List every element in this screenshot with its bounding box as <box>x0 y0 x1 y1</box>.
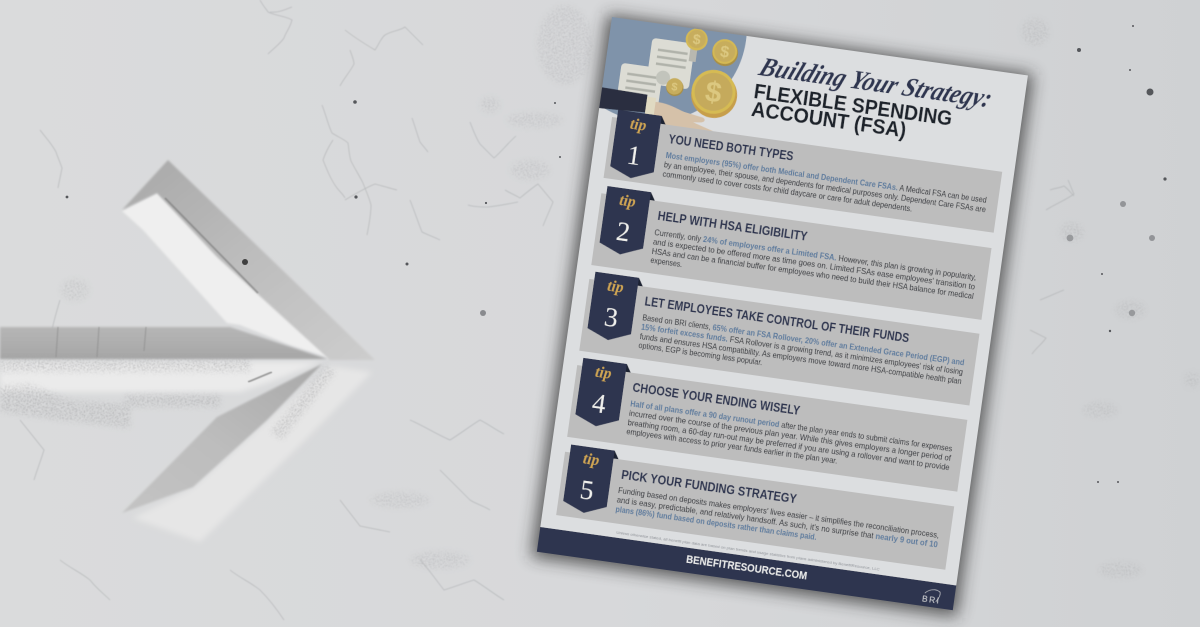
title <box>749 51 997 154</box>
BRI logo <box>921 588 941 606</box>
panel: tip 5 <box>556 444 955 570</box>
tip 5 heading: PICK YOUR FUNDING STRATEGY <box>620 468 798 506</box>
illustration: coin top: $ <box>692 31 702 48</box>
panel: tip 4 <box>567 357 969 492</box>
arrow: dark grooves and speckled scars <box>0 198 372 440</box>
tip 1 body: commonly used to cover costs for child daycare or care for adult dependents. <box>662 168 913 213</box>
tip 3 body <box>638 312 965 395</box>
tip 5 ribbon: tip <box>582 450 601 469</box>
illustration: front receipt <box>618 63 670 102</box>
tip 5 body: plans (86%) fund based on deposits rather than claims paid. <box>615 504 817 542</box>
illustration: suit sleeve <box>599 87 648 115</box>
tip 3 ribbon: 3 <box>602 302 620 333</box>
illustration: coin top <box>686 28 708 51</box>
illustration: open hand <box>653 102 716 131</box>
arrow: upper barb <box>122 160 375 360</box>
tip 3 ribbon <box>586 272 644 344</box>
illustration: back receipt <box>646 38 698 90</box>
tip 2 ribbon: 2 <box>614 216 632 247</box>
title: script line: Building Your Strategy: <box>754 52 997 113</box>
tip 2 body: expenses. <box>650 255 683 269</box>
tip 4 body: breathing room, a 60-day run-out may be preferred if you are using a rollover and want to provide <box>627 417 951 472</box>
paper shadow <box>531 14 1033 617</box>
arrow carved into the concrete <box>0 160 375 542</box>
tip 1 ribbon: tip <box>629 116 648 135</box>
arrow: light highlights around the carved strokes <box>122 193 330 358</box>
tip 3 heading: LET EMPLOYEES TAKE CONTROL OF THEIR FUNDS <box>644 294 910 345</box>
tip 3 body: funds and ensures HSA compatibility. As employers move toward more HSA-compatible health plan <box>639 331 963 386</box>
tip 1 heading: YOU NEED BOTH TYPES <box>668 132 794 164</box>
illustration: coin right <box>712 39 738 66</box>
tip 1 ribbon <box>609 110 667 182</box>
tip 4 ribbon: tip <box>594 364 613 383</box>
title: line one: FLEXIBLE SPENDING <box>752 79 954 131</box>
panel: tip 2 <box>591 185 993 320</box>
panel: tip 3 <box>579 271 981 406</box>
title: line two: ACCOUNT (FSA) <box>750 97 908 142</box>
tip 5 ribbon: 5 <box>578 474 596 506</box>
illustration: coin small: $ <box>671 81 678 94</box>
tip 2 heading: HELP WITH HSA ELIGIBILITY <box>657 209 809 244</box>
header illustration <box>599 17 747 131</box>
tip 2 ribbon: tip <box>618 192 637 211</box>
BRI logo: BRI <box>921 593 940 606</box>
tip 5 ribbon <box>562 444 620 517</box>
tip 2 body: HSAs and can be a financial buffer for employees who need to build their HSA balance for medical <box>651 246 975 301</box>
tip 1 body: by an employee, their spouse, and dependents for medical purposes only. Dependent Care FSAs are <box>663 159 987 214</box>
tip 4 body <box>626 398 954 482</box>
illustration: blue circle <box>602 17 747 115</box>
illustration: shirt cuff <box>644 96 656 115</box>
tip 2 body: Currently, only 24% of employers offer a Limited FSA. However, this plan is growing in popularity, <box>654 227 977 282</box>
tip 4 ribbon: 4 <box>590 388 608 419</box>
illustration: coin right: $ <box>719 43 730 62</box>
tip 3 body: Based on BRI clients, 65% offer an FSA Rollover, 20% offer an Extended Grace Period (EGP) and <box>642 312 965 367</box>
flyer paper <box>537 17 1028 610</box>
fine print: Unless otherwise stated, all benefit plan data are based on plan trends and usage statistics from plans administered by BenefitResource, LLC <box>616 531 880 572</box>
tip 4 ribbon <box>574 358 632 430</box>
tip 3 body: options, EGP is becoming less popular. <box>638 340 763 367</box>
illustration: coin large <box>690 70 738 118</box>
illustration: coin large: $ <box>703 76 724 110</box>
illustration: coin small <box>666 78 684 96</box>
tip 5 body: and is easy, predictable, and relatively handsoff. As such, it's no surprise that nearly 9 out of 10 <box>616 494 939 549</box>
footer bar <box>537 527 956 610</box>
tip 3 body: 15% forfeit excess funds. FSA Rollover is a growing trend, as it minimizes employees' risk of losing <box>641 322 964 377</box>
footer url: BENEFITRESOURCE.COM <box>685 554 808 583</box>
arrow: shaft <box>0 327 327 359</box>
arrow: lower barb <box>122 364 322 513</box>
tip 1 body: Most employers (95%) offer both Medical and Dependent Care FSAs. A Medical FSA can be used <box>665 150 988 205</box>
tip 2 body <box>650 227 977 310</box>
flyer: rotated FSA sheet <box>536 17 1028 610</box>
tip 4 heading: CHOOSE YOUR ENDING WISELY <box>632 381 802 418</box>
tip 4 body: Half of all plans offer a 90 day runout period after the plan year ends to submit claims for expenses <box>630 398 953 454</box>
tip 2 body: and is expected to be offered more as time goes on. Limited FSAs ease employees' transition to <box>652 236 976 292</box>
tip 4 body: employees with access to prior year funds earlier in the plan year. <box>626 426 838 466</box>
tip 5 body: Funding based on deposits makes employers' lives easier – it simplifies the reconciliation process, <box>618 485 940 540</box>
tip 2 ribbon <box>598 186 656 258</box>
panel: tip 1 <box>604 109 1003 233</box>
tip 4 body: incurred over the course of the previous plan year. While this gives employers a longer period of <box>628 408 952 463</box>
tip 1 ribbon: 1 <box>625 140 643 171</box>
tip 3 ribbon: tip <box>606 278 625 297</box>
